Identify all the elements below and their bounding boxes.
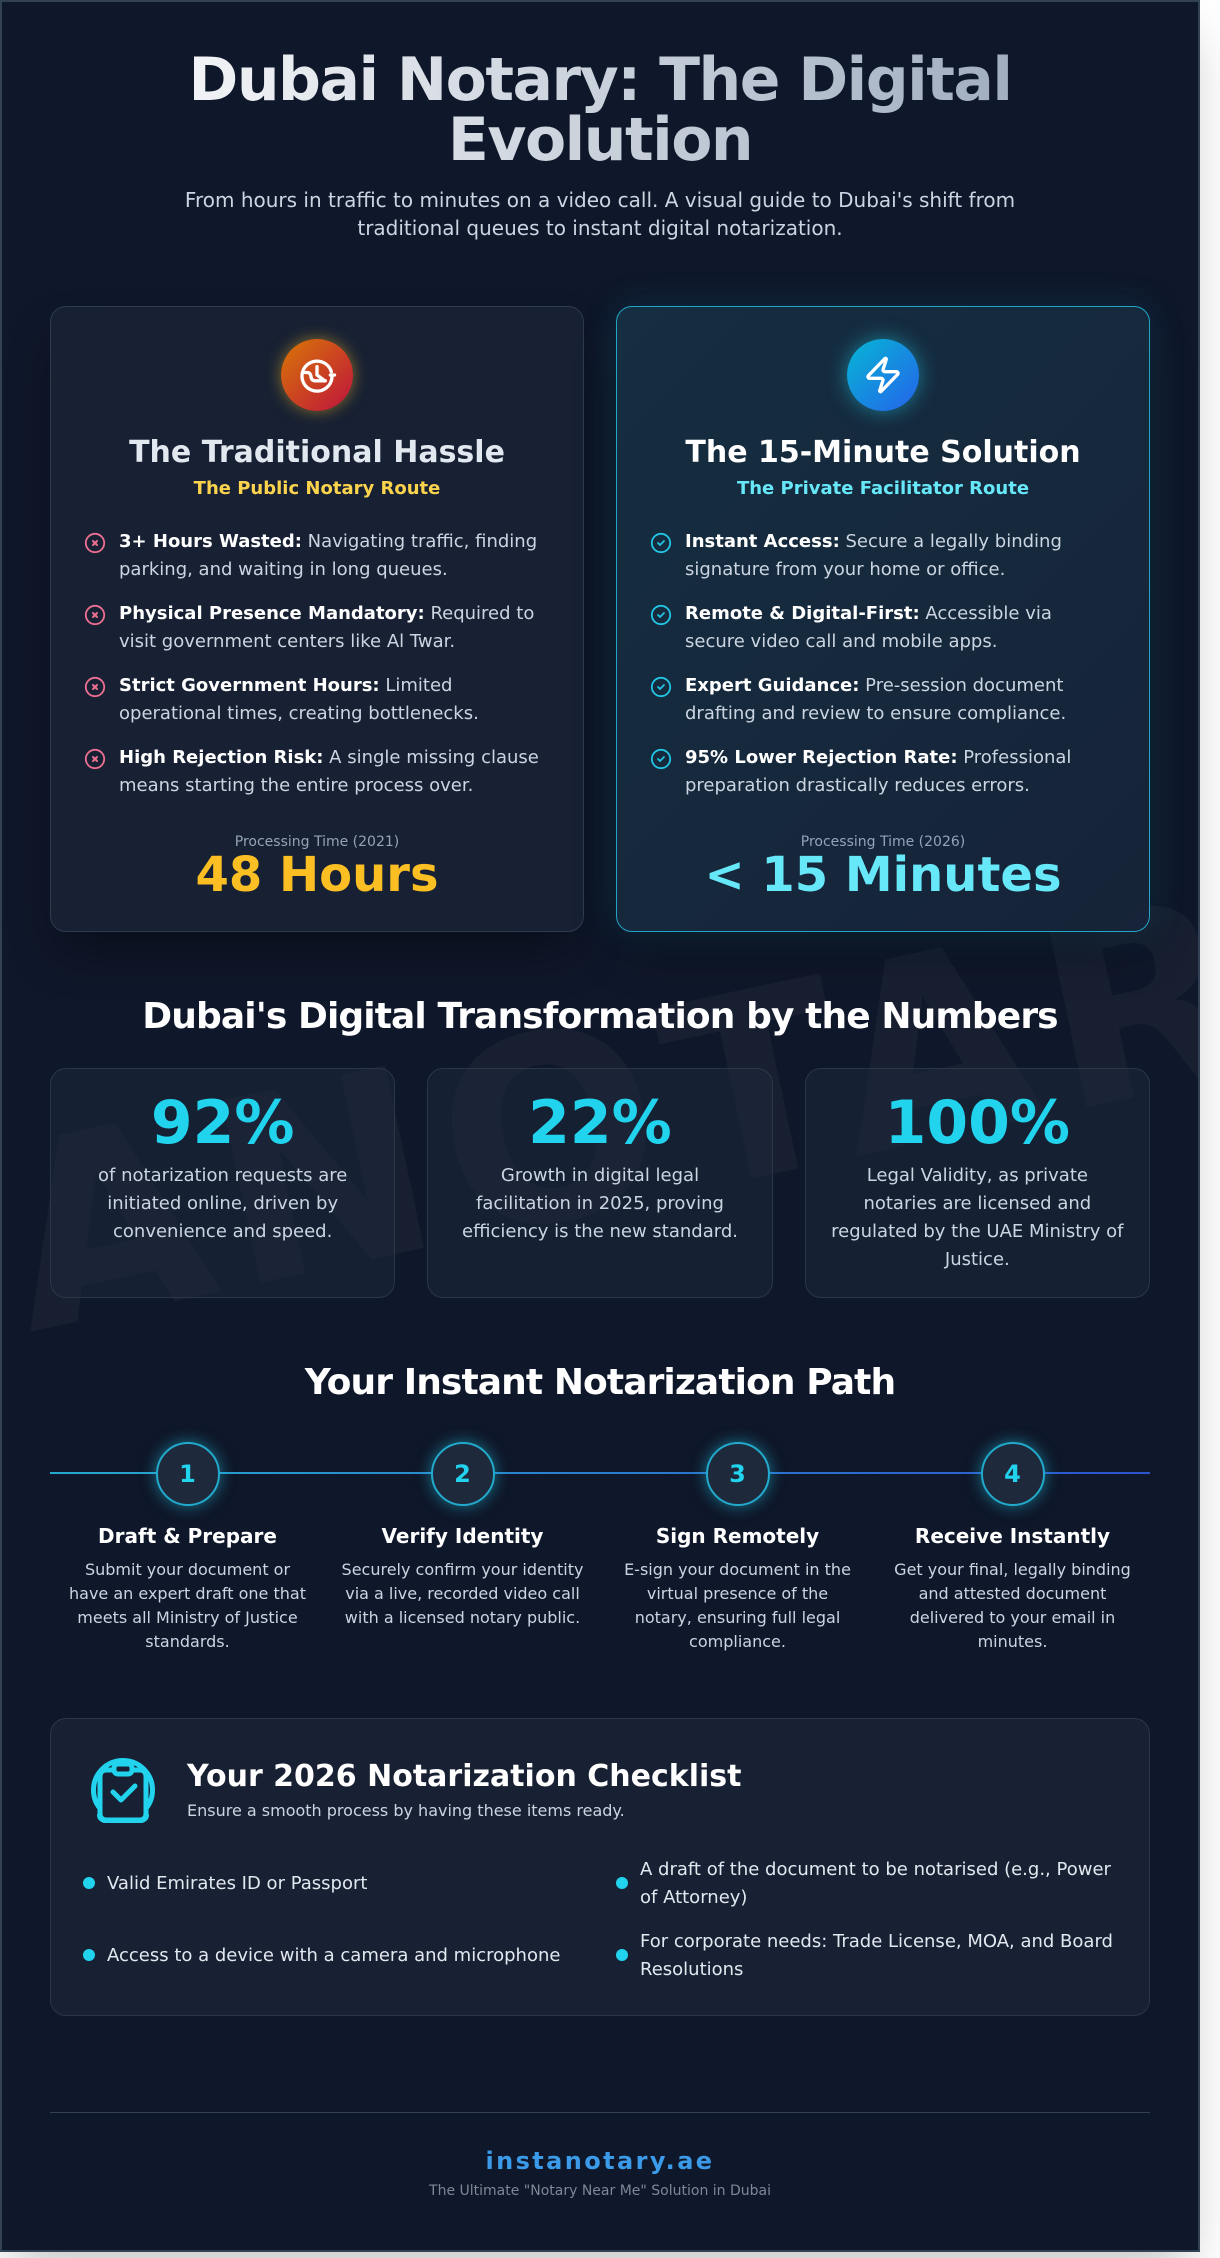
header xyxy=(185,45,1015,240)
stat card: 22%: efficiency is the new standard. xyxy=(462,1221,738,1242)
step 4: minutes. xyxy=(978,1632,1047,1651)
item: corporate xyxy=(616,1931,1113,1980)
step 3: Sign Remotely xyxy=(656,1524,819,1548)
item: draft: of Attorney) xyxy=(640,1887,747,1908)
benefit: expert guidance xyxy=(650,675,1066,724)
item: corporate: Resolutions xyxy=(640,1959,743,1980)
problem: hours wasted: 3+ Hours Wasted: Navigating traffic, finding xyxy=(119,531,537,552)
processing time label 2026: Processing Time (2026) xyxy=(801,834,965,850)
step 4 xyxy=(894,1433,1131,1651)
heading: traditional hassle: The Traditional Hassle xyxy=(129,435,505,470)
problem: government hours: operational times, creating bottlenecks. xyxy=(119,703,479,724)
step 4: 4 xyxy=(1004,1460,1021,1488)
step 3: compliance. xyxy=(689,1632,786,1651)
heading: 15-minute solution: The 15-Minute Solution xyxy=(685,435,1081,470)
step 2: via a live, recorded video call xyxy=(345,1584,580,1603)
step 4: Receive Instantly xyxy=(915,1524,1110,1548)
stat: 48 hours: 48 Hours xyxy=(195,847,439,903)
checklist subtitle: Ensure a smooth process by having these items ready. xyxy=(187,1801,625,1820)
benefit: remote and digital xyxy=(650,603,1052,652)
stat card: 100%: regulated by the UAE Ministry of xyxy=(831,1221,1124,1242)
icon: clock history xyxy=(281,339,353,411)
icon: lightning bolt xyxy=(847,339,919,411)
problem: rejection risk: means starting the entire process over. xyxy=(119,775,473,796)
step 1 xyxy=(69,1433,306,1651)
problem: physical presence: visit government centers like Al Twar. xyxy=(119,631,455,652)
step 4: and attested document xyxy=(919,1584,1106,1603)
title: Dubai Notary: The Digital Evolution xyxy=(189,45,1011,175)
problem: physical presence xyxy=(84,603,534,652)
checklist items xyxy=(83,1859,1113,1980)
step 2: with a licensed notary public. xyxy=(345,1608,580,1627)
step 1: meets all Ministry of Justice xyxy=(77,1608,298,1627)
subtitle: From hours in traffic to minutes on a video call. A visual guide to Dubai's shift from xyxy=(185,188,1015,212)
step 1: Draft & Prepare xyxy=(98,1524,277,1548)
item: draft: A draft of the document to be notarised (e.g., Power xyxy=(640,1859,1111,1880)
stat card: 92%: 92% xyxy=(151,1088,294,1158)
benefit: remote and digital: Remote & Digital-First: Accessible via xyxy=(685,603,1052,624)
stat card: 100% xyxy=(805,1068,1150,1298)
stat card: 100%: Legal Validity, as private xyxy=(867,1165,1088,1186)
item: ID: Valid Emirates ID or Passport xyxy=(107,1873,367,1894)
checklist titles xyxy=(186,1759,741,1820)
panel: checklist xyxy=(50,1718,1150,2016)
processing time label 2021: Processing Time (2021) xyxy=(235,834,399,850)
problem: rejection risk: High Rejection Risk: A single missing clause xyxy=(119,747,539,768)
step 3: virtual presence of the xyxy=(647,1584,828,1603)
benefit: expert guidance: Expert Guidance: Pre-session document xyxy=(685,675,1063,696)
tagline: The Ultimate "Notary Near Me" Solution in Dubai xyxy=(429,2183,771,2199)
icon: clipboard check xyxy=(91,1758,155,1823)
stat card: 22%: 22% xyxy=(528,1088,672,1158)
stat card: 22% xyxy=(427,1068,773,1298)
subheading: private facilitator route: The Private Facilitator Route xyxy=(737,478,1029,499)
heading: numbers section: Dubai's Digital Transformation by the Numbers xyxy=(142,996,1058,1037)
step 4: Get your final, legally binding xyxy=(894,1560,1131,1579)
list of problems xyxy=(84,531,539,796)
step 2 xyxy=(342,1433,583,1627)
benefit: lower rejection xyxy=(650,747,1071,796)
stat card: 92%: convenience and speed. xyxy=(113,1221,332,1242)
benefit: remote and digital: secure video call and mobile apps. xyxy=(685,631,997,652)
step 2: 2 xyxy=(454,1460,471,1488)
item: draft xyxy=(616,1859,1111,1908)
benefit: instant access xyxy=(650,531,1062,580)
timeline of steps xyxy=(50,1433,1150,1651)
stat card: 92% xyxy=(50,1068,395,1298)
footer xyxy=(50,2112,1150,2201)
benefit: expert guidance: drafting and review to ensure compliance. xyxy=(685,703,1066,724)
heading: notarization path: Your Instant Notarization Path xyxy=(305,1362,895,1403)
stat card: 100%: notaries are licensed and xyxy=(863,1193,1091,1214)
stat cards xyxy=(50,1068,1150,1298)
item: device: Access to a device with a camera and microphone xyxy=(107,1945,560,1966)
step 3: 3 xyxy=(729,1460,746,1488)
stat card: 100%: 100% xyxy=(885,1088,1070,1158)
benefit: lower rejection: preparation drastically reduces errors. xyxy=(685,775,1030,796)
problem: hours wasted: parking, and waiting in long queues. xyxy=(119,559,448,580)
step 2: Securely confirm your identity xyxy=(342,1560,583,1579)
benefit: instant access: Instant Access: Secure a legally binding xyxy=(685,531,1062,552)
panel: 15-minute solution xyxy=(616,306,1150,932)
benefit: lower rejection: 95% Lower Rejection Rate: Professional xyxy=(685,747,1071,768)
problem: hours wasted xyxy=(84,531,537,580)
problem: rejection risk xyxy=(84,747,539,796)
step 1: Submit your document or xyxy=(85,1560,290,1579)
step 3 xyxy=(624,1433,851,1651)
step 1: standards. xyxy=(145,1632,230,1651)
stat card: 22%: Growth in digital legal xyxy=(501,1165,699,1186)
subtitle xyxy=(185,188,1015,240)
step 2: Verify Identity xyxy=(382,1524,543,1548)
subheading: public notary route: The Public Notary Route xyxy=(194,478,440,499)
brand: instanotary.ae xyxy=(486,2147,714,2175)
step 1: 1 xyxy=(179,1460,196,1488)
checklist header xyxy=(91,1758,741,1823)
comparison panels xyxy=(50,302,1150,950)
problem: government hours: Strict Government Hours: Limited xyxy=(119,675,452,696)
benefit: instant access: signature from your home or office. xyxy=(685,559,1005,580)
stat card: 22%: facilitation in 2025, proving xyxy=(476,1193,724,1214)
item: corporate: For corporate needs: Trade License, MOA, and Board xyxy=(640,1931,1113,1952)
stat card: 92%: initiated online, driven by xyxy=(107,1193,338,1214)
problem: government hours xyxy=(84,675,479,724)
checklist title: Your 2026 Notarization Checklist xyxy=(187,1759,741,1794)
step 1: have an expert draft one that xyxy=(69,1584,306,1603)
problem: physical presence: Physical Presence Mandatory: Required to xyxy=(119,603,534,624)
step 3: notary, ensuring full legal xyxy=(635,1608,840,1627)
subtitle: traditional queues to instant digital notarization. xyxy=(357,216,843,240)
stat: under 15 minutes: < 15 Minutes xyxy=(704,847,1062,903)
step 4: delivered to your email in xyxy=(910,1608,1115,1627)
list of benefits xyxy=(650,531,1071,796)
stat card: 100%: Justice. xyxy=(945,1249,1010,1270)
step 3: E-sign your document in the xyxy=(624,1560,851,1579)
panel: traditional hassle xyxy=(50,306,584,932)
stat card: 92%: of notarization requests are xyxy=(98,1165,347,1186)
